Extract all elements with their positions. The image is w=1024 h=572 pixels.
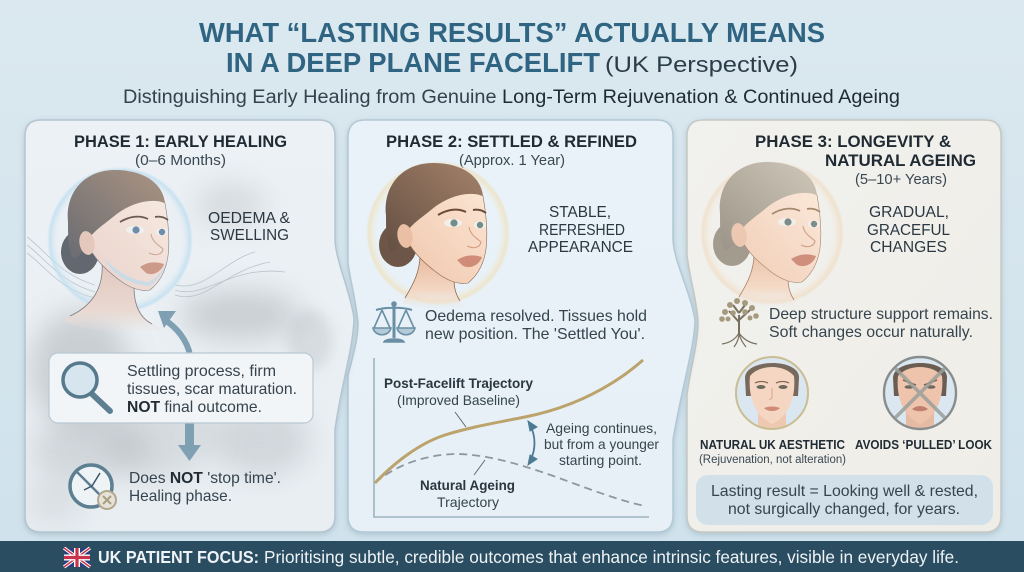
phase 2 body text: new position. The 'Settled You'. xyxy=(425,326,645,343)
phase 2 heading: (Approx. 1 Year) xyxy=(459,152,565,169)
callout: lasting result: Lasting result = Looking well & rested, xyxy=(711,483,978,500)
portrait: settled woman xyxy=(366,161,510,308)
natural ageing line xyxy=(375,454,645,506)
phase 3 heading: PHASE 3: LONGEVITY & xyxy=(755,132,951,151)
title: IN A DEEP PLANE FACELIFT xyxy=(226,47,600,78)
chart labels: starting point. xyxy=(559,452,642,468)
clock text: Does NOT 'stop time'. xyxy=(129,470,281,487)
double-headed arrow xyxy=(528,421,537,465)
phase 1 caption xyxy=(208,210,291,244)
icon: UK flag xyxy=(64,548,90,567)
phase 3 body text: Soft changes occur naturally. xyxy=(769,324,973,341)
title xyxy=(199,17,825,78)
aesthetic labels: AVOIDS ‘PULLED’ LOOK xyxy=(855,438,992,452)
phase 3 body text xyxy=(769,306,993,341)
callout text: Settling process, firm xyxy=(127,363,276,380)
clock text xyxy=(129,470,281,505)
title: (UK Perspective) xyxy=(605,52,798,77)
icon: magnifying glass xyxy=(63,363,110,411)
panel: phase 1 early healing xyxy=(25,120,354,532)
clock text: Healing phase. xyxy=(129,488,232,505)
footer banner xyxy=(0,541,1024,572)
background smoke xyxy=(25,183,332,525)
chart labels: (Improved Baseline) xyxy=(397,392,520,408)
phase 2 caption: REFRESHED xyxy=(539,222,625,239)
icon: scales xyxy=(373,302,415,342)
portrait: older woman xyxy=(700,161,844,307)
phase 3 body text: Deep structure support remains. xyxy=(769,306,993,323)
phase 1 caption: SWELLING xyxy=(210,227,289,244)
phase 1 heading: (0–6 Months) xyxy=(135,152,226,169)
chart labels: but from a younger xyxy=(544,436,659,452)
icon: tree xyxy=(719,298,759,347)
pulled look portrait crossed out xyxy=(884,356,956,432)
chart labels xyxy=(384,375,659,510)
phase 2 caption: APPEARANCE xyxy=(528,239,633,256)
phase 2 body text xyxy=(425,308,647,343)
callout text: NOT final outcome. xyxy=(127,399,262,416)
chart: post-facelift vs natural ageing trajectory xyxy=(374,358,659,517)
phase 3 heading: NATURAL AGEING xyxy=(825,151,976,170)
panel: phase 2 settled xyxy=(348,120,695,532)
title: WHAT “LASTING RESULTS” ACTUALLY MEANS xyxy=(199,17,825,48)
arrow: down xyxy=(178,423,201,461)
phase 2 caption: STABLE, xyxy=(549,204,611,221)
subtitle: Distinguishing Early Healing from Genuine Long-Term Rejuvenation & Continued Ageing xyxy=(123,87,900,108)
swelling wave lines xyxy=(27,237,285,298)
phase 2 heading xyxy=(386,132,637,169)
footer text: Prioritising subtle, credible outcomes that enhance intrinsic features, visible in everyday life. xyxy=(264,547,959,567)
phase 1 caption: OEDEMA & xyxy=(208,210,291,227)
phase 3 heading xyxy=(755,132,976,188)
chart labels: Ageing continues, xyxy=(546,420,657,436)
phase 3 caption: GRADUAL, xyxy=(869,204,949,221)
phase 2 caption xyxy=(528,204,633,256)
chart labels: Trajectory xyxy=(437,494,499,510)
aesthetic labels: (Rejuvenation, not alteration) xyxy=(699,454,846,466)
aesthetic labels xyxy=(699,438,992,466)
phase 2 body text: Oedema resolved. Tissues hold xyxy=(425,308,647,325)
panel: phase 3 longevity xyxy=(687,120,1001,532)
callout: lasting result xyxy=(696,475,993,525)
phase 3 caption: CHANGES xyxy=(870,239,947,256)
phase 1 heading: PHASE 1: EARLY HEALING xyxy=(74,132,287,151)
portrait: healing woman xyxy=(47,167,193,332)
footer text: UK PATIENT FOCUS: xyxy=(98,547,259,567)
phase 3 caption xyxy=(867,204,950,256)
aesthetic labels: NATURAL UK AESTHETIC xyxy=(700,438,845,452)
phase 2 heading: PHASE 2: SETTLED & REFINED xyxy=(386,132,637,151)
callout: lasting result: not surgically changed, for years. xyxy=(728,501,960,518)
callout: settling process xyxy=(49,353,313,423)
callout text: tissues, scar maturation. xyxy=(127,381,297,398)
chart labels: Natural Ageing xyxy=(420,477,515,493)
arrow: curved up xyxy=(158,311,190,355)
post-facelift line xyxy=(375,360,643,483)
phase 3 caption: GRACEFUL xyxy=(867,222,950,239)
natural UK aesthetic portrait xyxy=(736,356,808,432)
callout text xyxy=(127,363,297,416)
phase 1 heading xyxy=(74,132,287,169)
icon: clock with cross xyxy=(70,465,116,509)
chart labels: Post-Facelift Trajectory xyxy=(384,375,533,391)
phase 3 heading: (5–10+ Years) xyxy=(855,171,947,188)
